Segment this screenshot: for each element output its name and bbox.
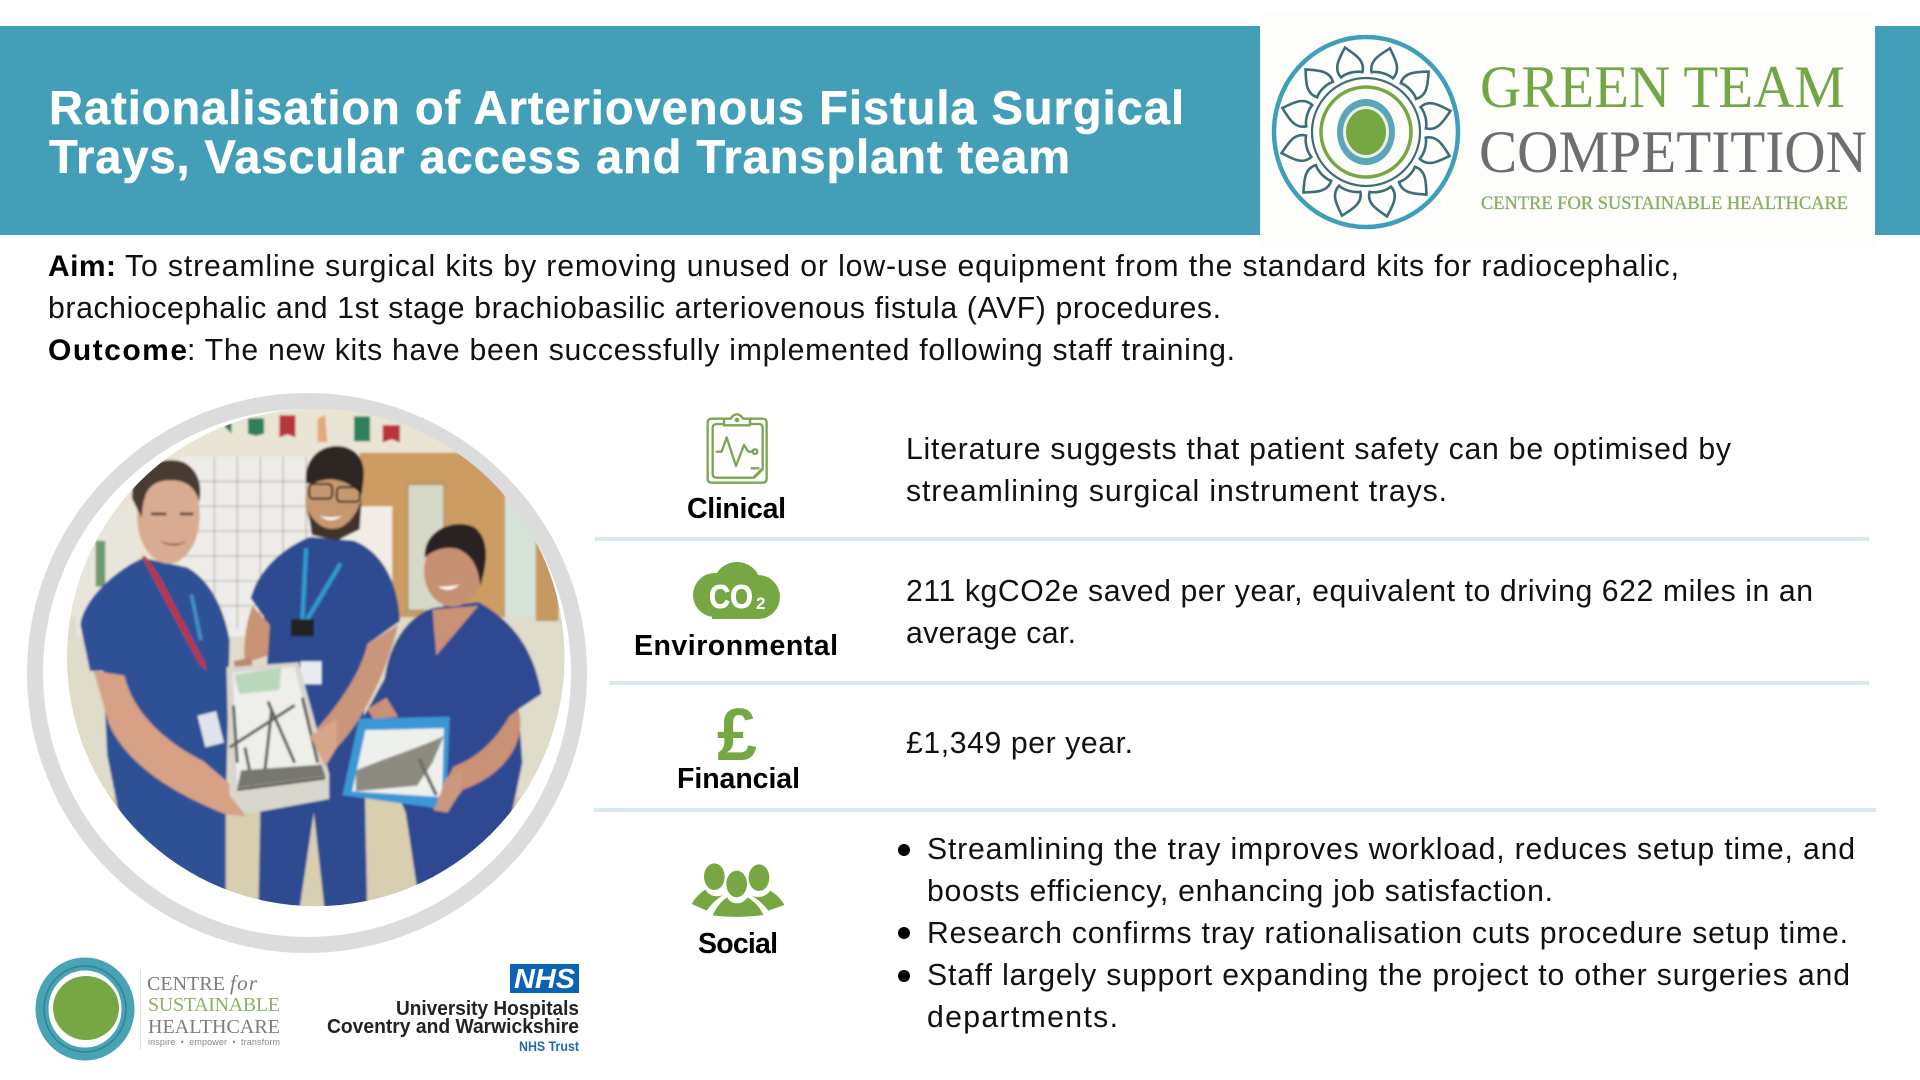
text: clinical: Literature suggests that patient safety can be optimised by [906, 433, 1732, 466]
row: financial [677, 693, 1133, 795]
text: social bullets: Streamlining the tray improves workload, reduces setup time, and [927, 833, 1855, 866]
text: environmental: average car. [906, 617, 1076, 650]
intro: aim and outcome: brachiocephalic and 1st stage brachiobasilic arteriovenous fistula (AVF) procedures. [48, 292, 1221, 325]
label: financial: Financial [677, 763, 800, 795]
logo: NHS University Hospitals Coventry and Warwickshire [327, 963, 579, 1054]
frame ring [35, 401, 579, 945]
intro: aim and outcome [48, 250, 1679, 367]
text: environmental [906, 575, 1813, 650]
logo: Centre for Sustainable Healthcare [42, 964, 280, 1054]
blue tray [343, 717, 450, 809]
text: social bullets: Staff largely support expanding the project to other surgeries and [927, 959, 1850, 992]
wordmark: CENTRE [147, 973, 225, 995]
logo text: COMPETITION [1479, 119, 1867, 185]
title [49, 81, 1184, 183]
centre person [251, 537, 400, 916]
icon: CO2 cloud [693, 562, 780, 619]
logo sun emblem [1274, 37, 1458, 227]
row: social [692, 833, 1855, 1034]
icon: three people [692, 863, 784, 917]
logo: Green Team Competition [1260, 13, 1875, 248]
label: clinical: Clinical [687, 493, 786, 525]
row: environmental [634, 562, 1813, 662]
icon: clipboard with heartbeat [708, 414, 767, 483]
title: Rationalisation of Arteriovenous Fistula Surgical [49, 81, 1184, 134]
wordmark: for [230, 971, 258, 995]
text: social bullets: boosts efficiency, enhancing job satisfaction. [927, 875, 1553, 908]
text: social bullets: departments. [927, 1001, 1118, 1034]
text: environmental: 211 kgCO2e saved per year, equivalent to driving 622 miles in an [906, 575, 1813, 608]
icon: pound sign: £ [717, 693, 757, 776]
photo [67, 409, 564, 906]
left person [80, 558, 230, 916]
right person [364, 602, 542, 897]
wordmark: inspire • empower • transform [148, 1037, 280, 1047]
icon: CO2 cloud: CO [709, 578, 753, 615]
text: social bullets: Research confirms tray rationalisation cuts procedure setup time. [927, 917, 1848, 950]
wordmark [147, 971, 280, 1047]
label: environmental: Environmental [634, 630, 838, 662]
intro: aim and outcome: Outcome [48, 334, 187, 367]
wordmark: HEALTHCARE [148, 1016, 280, 1038]
silver tray [227, 662, 329, 814]
label: social: Social [698, 928, 778, 960]
text: social bullets [898, 833, 1855, 1034]
text: clinical [906, 433, 1732, 508]
trust name [327, 998, 579, 1054]
title: Trays, Vascular access and Transplant team [49, 130, 1070, 183]
header banner [0, 26, 1920, 235]
row: clinical [687, 414, 1732, 525]
text: clinical: streamlining surgical instrument trays. [906, 475, 1447, 508]
wordmark: SUSTAINABLE [148, 994, 280, 1016]
logo text: GREEN TEAM [1480, 54, 1845, 120]
trust name: University Hospitals [396, 998, 579, 1020]
hands [310, 719, 337, 767]
intro: aim and outcome: Aim: [48, 250, 116, 283]
trust name: Coventry and Warwickshire [327, 1016, 579, 1038]
icon: CO2 cloud: 2 [756, 594, 765, 613]
emblem [42, 964, 128, 1054]
NHS lozenge: NHS [514, 963, 575, 994]
divider lines [594, 537, 1876, 812]
team photo in circular frame [35, 399, 579, 945]
text: financial: £1,349 per year. [906, 727, 1133, 760]
intro: aim and outcome: : The new kits have been successfully implemented following staff training. [187, 334, 1235, 367]
trust name: NHS Trust [519, 1039, 579, 1054]
intro: aim and outcome: To streamline surgical kits by removing unused or low-use equipment from the standard kits for radiocephalic, [125, 250, 1679, 283]
logo text [1479, 54, 1867, 214]
logo text: CENTRE FOR SUSTAINABLE HEALTHCARE [1481, 193, 1848, 214]
